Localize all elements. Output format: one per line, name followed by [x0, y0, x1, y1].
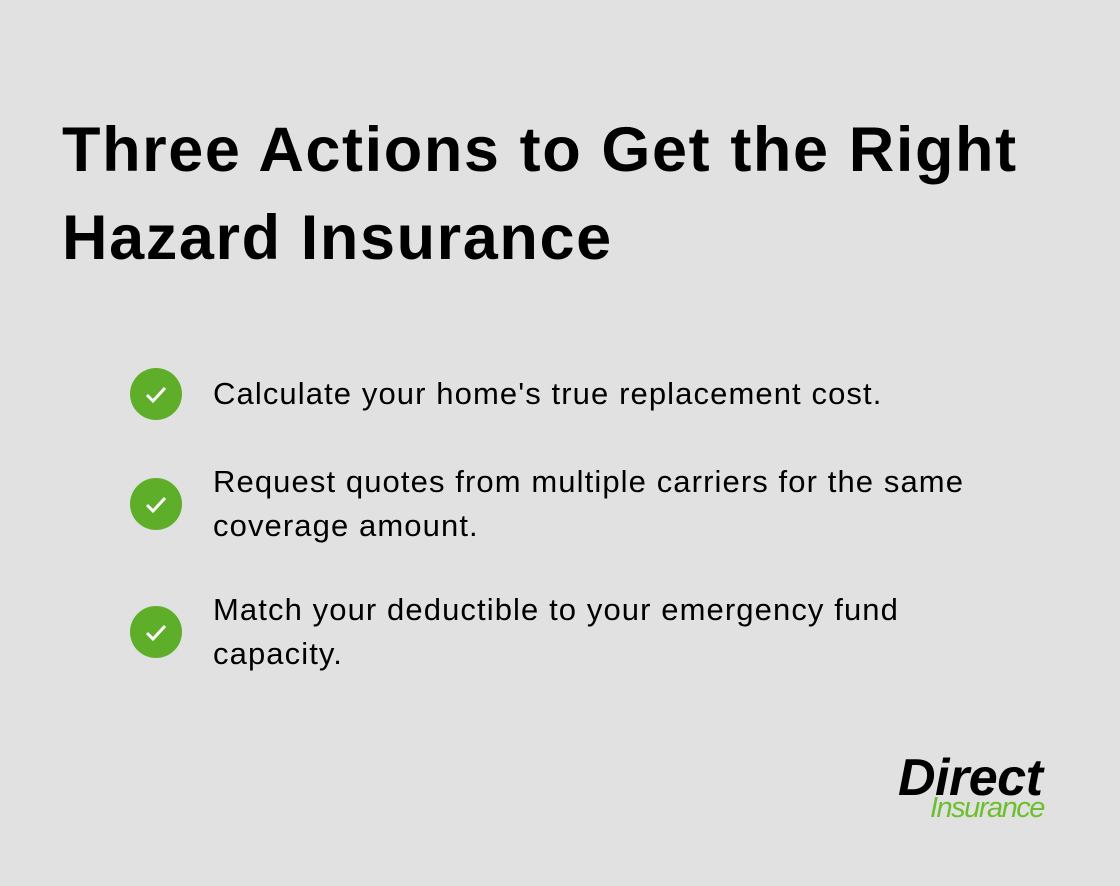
text 2: Request quotes from multiple carriers for the same coverage amount. — [213, 464, 964, 543]
item 1 — [130, 368, 882, 420]
logo: Direct — [898, 749, 1042, 807]
logo: Insurance — [930, 792, 1044, 824]
title: Three Actions to Get the Right Hazard Insurance — [62, 115, 1018, 273]
icon: check — [130, 368, 182, 420]
text 3: Match your deductible to your emergency fund capacity. — [213, 592, 899, 671]
item 2 — [130, 464, 964, 543]
icon: check — [130, 606, 182, 658]
item 3 — [130, 592, 899, 671]
text 1: Calculate your home's true replacement cost. — [213, 376, 882, 411]
icon: check — [130, 478, 182, 530]
